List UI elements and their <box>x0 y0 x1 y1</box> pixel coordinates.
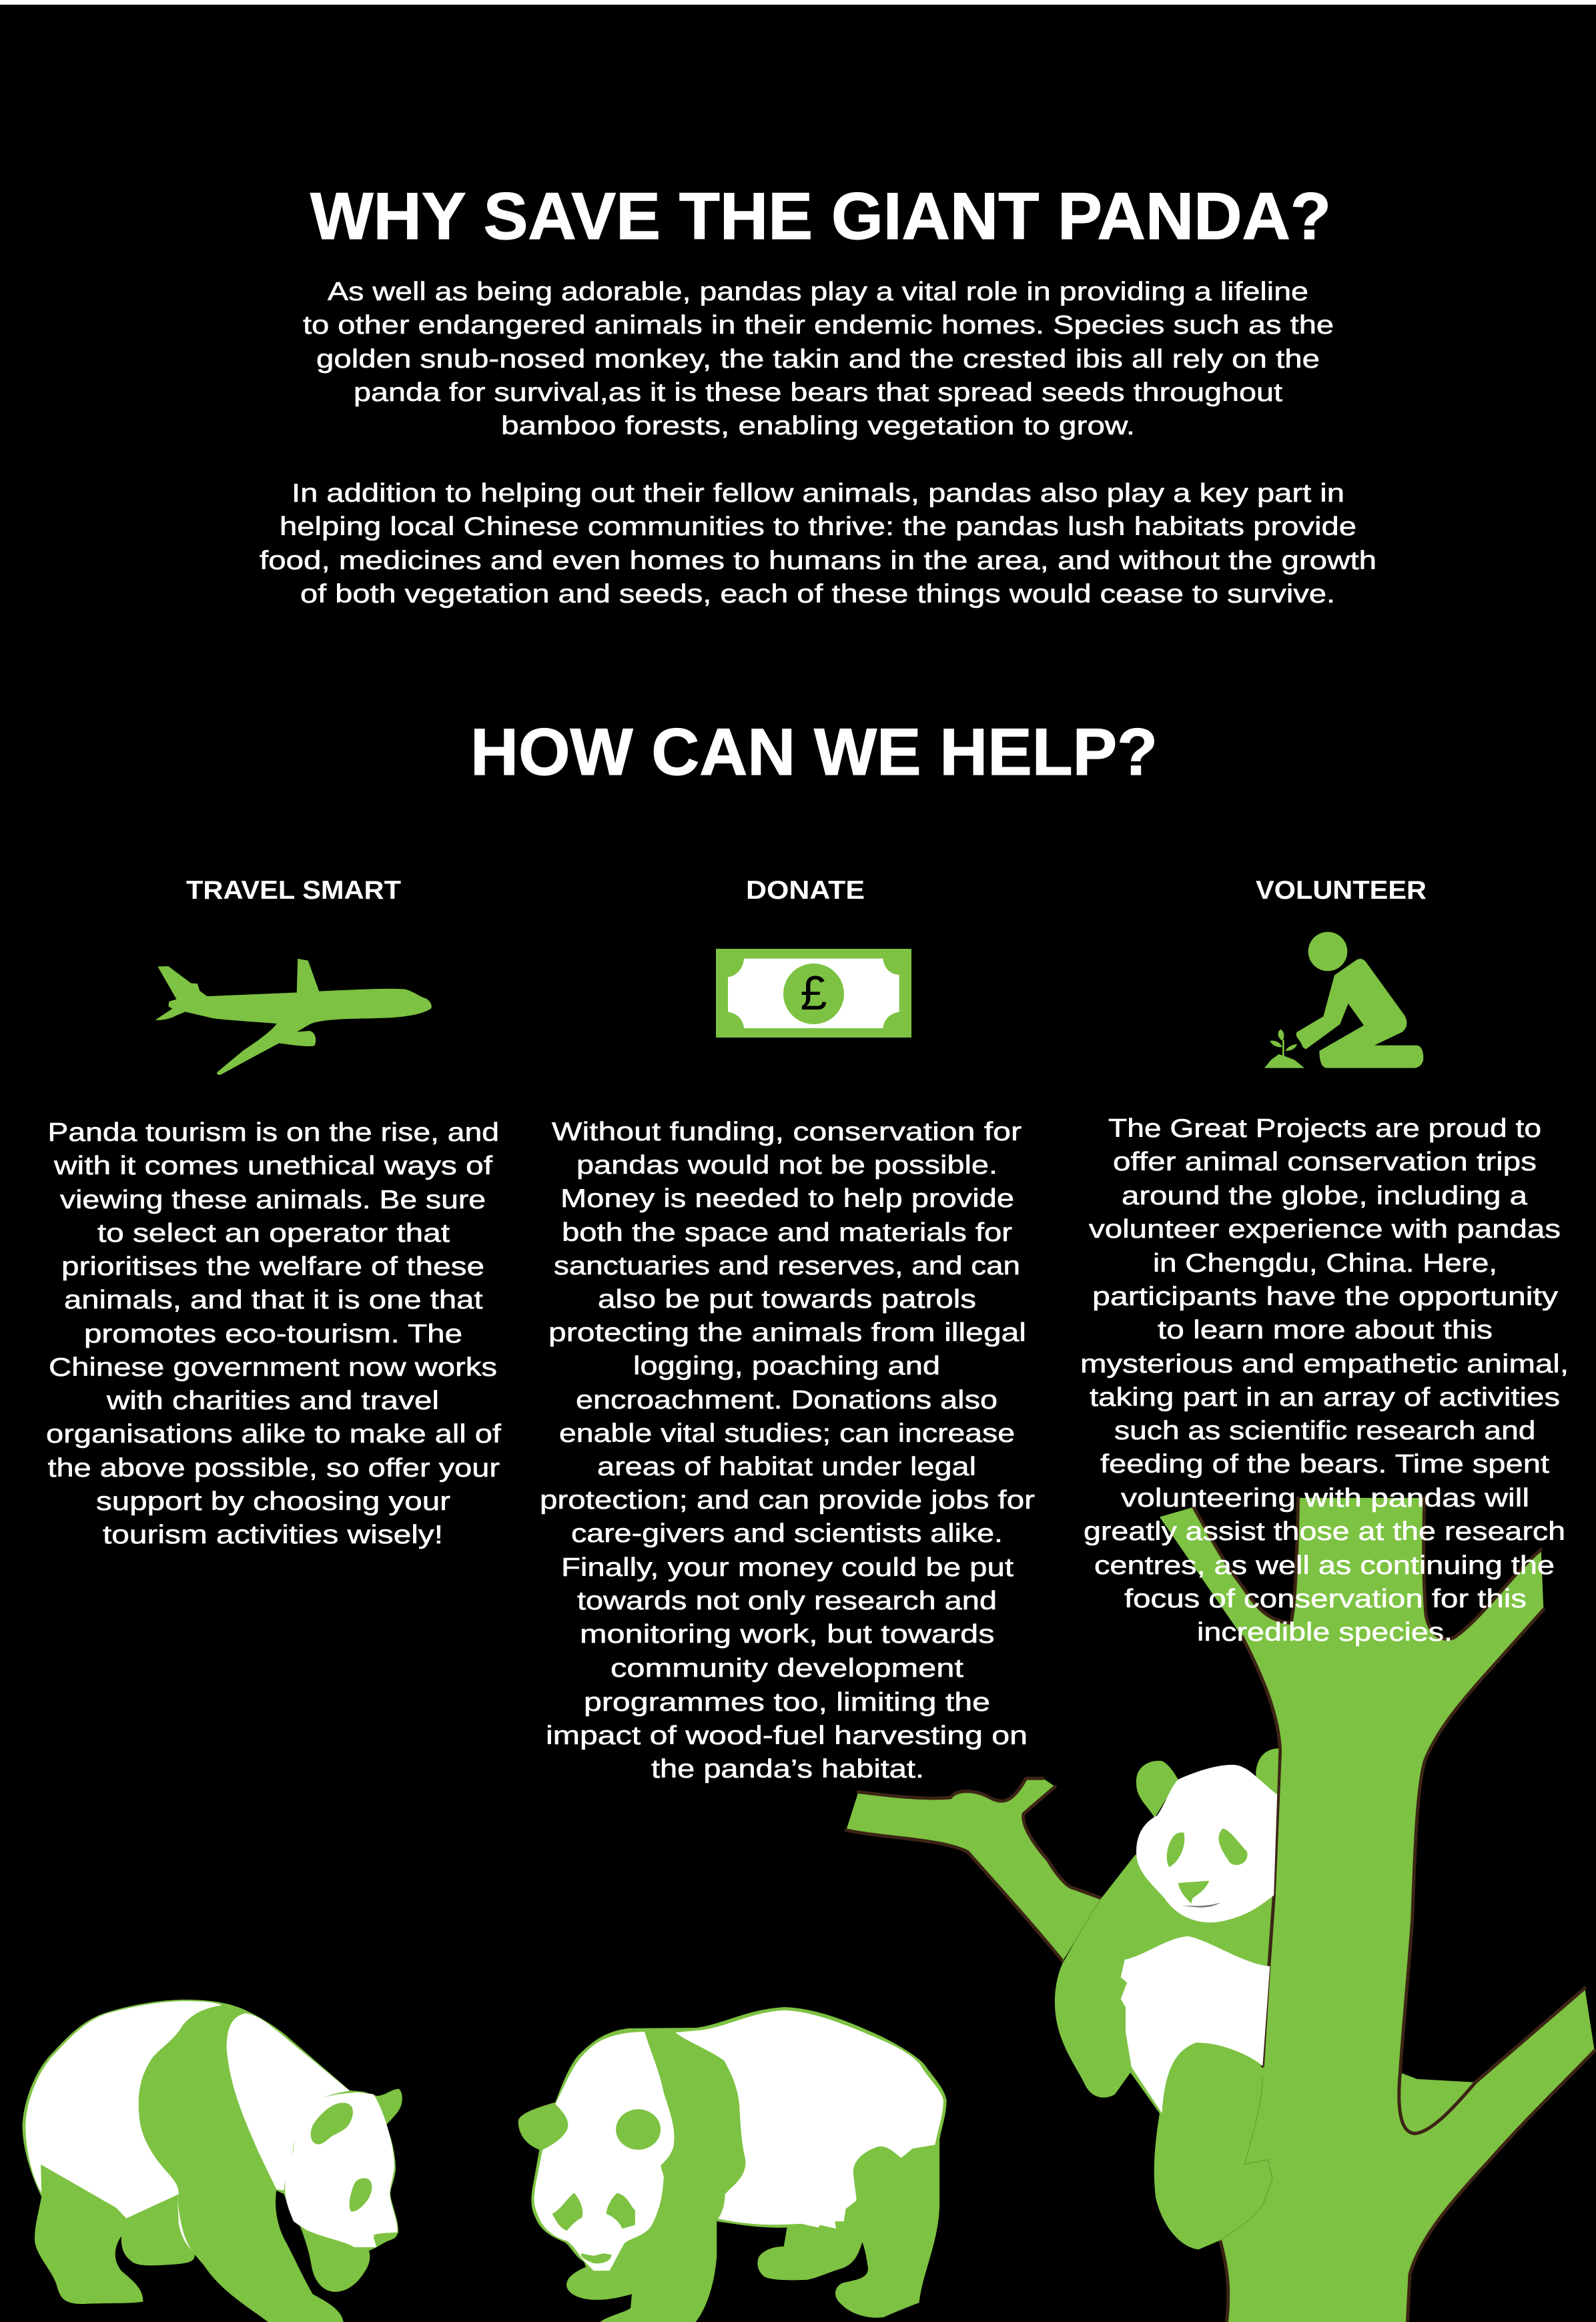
text: travel smart: animals, and that it is one that <box>64 1286 483 1314</box>
text: donate: protecting the animals from illegal <box>548 1318 1026 1347</box>
intro text paragraph one: panda for survival,as it is these bears that spread seeds throughout <box>354 378 1282 407</box>
intro text paragraph two: In addition to helping out their fellow animals, pandas also play a key part in <box>292 479 1344 508</box>
icon: pound banknote <box>716 949 911 1038</box>
tree trunk <box>1160 1498 1595 2322</box>
column heading: donate: DONATE <box>746 876 865 905</box>
text: volunteer: incredible species. <box>1197 1618 1453 1647</box>
text: volunteer: volunteer experience with pandas <box>1089 1215 1561 1244</box>
illustration: tree with climbing panda <box>846 1498 1595 2322</box>
text: volunteer: greatly assist those at the research <box>1084 1517 1565 1546</box>
text: travel smart: promotes eco-tourism. The <box>84 1320 462 1348</box>
text: volunteer: to learn more about this <box>1158 1316 1493 1344</box>
text: travel smart: organisations alike to make all of <box>46 1420 501 1449</box>
intro text paragraph two: food, medicines and even homes to humans in the area, and without the growth <box>260 546 1376 575</box>
text: donate: logging, poaching and <box>633 1352 940 1381</box>
column heading: volunteer: VOLUNTEER <box>1256 876 1427 905</box>
text: volunteer: focus of conservation for this <box>1124 1585 1527 1613</box>
text: volunteer: The Great Projects are proud to <box>1108 1114 1541 1143</box>
text: volunteer <box>1080 1114 1569 1647</box>
text: donate: monitoring work, but towards <box>580 1620 994 1649</box>
text: donate: towards not only research and <box>577 1587 997 1615</box>
text: travel smart <box>46 1118 501 1549</box>
text: donate: enable vital studies; can increase <box>559 1419 1015 1448</box>
text: donate: Money is needed to help provide <box>560 1184 1014 1213</box>
text: volunteer: in Chengdu, China. Here, <box>1153 1249 1497 1278</box>
icon: pound banknote: £ <box>800 967 827 1020</box>
text: donate: areas of habitat under legal <box>597 1453 976 1481</box>
text: donate: care-givers and scientists alike. <box>571 1519 1003 1548</box>
climbing panda <box>1055 1748 1280 2249</box>
tree side branch <box>846 1778 1102 1961</box>
text: donate: community development <box>611 1654 963 1683</box>
text: volunteer: such as scientific research and <box>1114 1417 1536 1445</box>
text: volunteer: centres, as well as continuing the <box>1094 1551 1555 1580</box>
text: donate: also be put towards patrols <box>598 1285 976 1314</box>
intro text paragraph one: bamboo forests, enabling vegetation to grow. <box>501 412 1135 440</box>
intro text paragraph two <box>260 479 1376 609</box>
text: travel smart: tourism activities wisely! <box>103 1521 443 1549</box>
text: donate: pandas would not be possible. <box>576 1151 998 1180</box>
text: travel smart: support by choosing your <box>96 1487 450 1516</box>
text: travel smart: with it comes unethical ways of <box>53 1152 492 1180</box>
text: donate: the panda’s habitat. <box>651 1755 924 1784</box>
text: travel smart: the above possible, so offer your <box>48 1454 500 1483</box>
text: donate: protection; and can provide jobs for <box>540 1486 1035 1515</box>
text: volunteer: participants have the opportunity <box>1092 1282 1559 1311</box>
illustration: panda walking left side <box>22 2000 402 2322</box>
text: travel smart: viewing these animals. Be sure <box>60 1186 486 1214</box>
intro text paragraph two: helping local Chinese communities to thrive: the pandas lush habitats provide <box>280 512 1356 541</box>
text: volunteer: taking part in an array of activities <box>1090 1383 1560 1412</box>
text: volunteer: volunteering with pandas will <box>1121 1484 1529 1513</box>
text: donate <box>540 1118 1035 1784</box>
text: travel smart: to select an operator that <box>97 1219 450 1248</box>
text: travel smart: with charities and travel <box>106 1387 439 1415</box>
text: donate: Finally, your money could be put <box>561 1553 1014 1582</box>
column heading: travel smart: TRAVEL SMART <box>186 876 401 905</box>
text: donate: sanctuaries and reserves, and can <box>554 1252 1020 1280</box>
text: travel smart: Panda tourism is on the rise, and <box>48 1118 499 1147</box>
title: why save the giant panda: WHY SAVE THE GIANT PANDA? <box>310 179 1331 253</box>
text: volunteer: mysterious and empathetic animal, <box>1080 1350 1569 1379</box>
intro text paragraph one: to other endangered animals in their endemic homes. Species such as the <box>303 311 1334 340</box>
text: travel smart: Chinese government now works <box>49 1353 497 1382</box>
icon: volunteer planting a seedling <box>1264 932 1423 1068</box>
text: donate: programmes too, limiting the <box>584 1688 990 1717</box>
intro text paragraph one: golden snub-nosed monkey, the takin and the crested ibis all rely on the <box>316 345 1320 374</box>
intro text paragraph one: As well as being adorable, pandas play a vital role in providing a lifeline <box>328 278 1308 306</box>
text: volunteer: around the globe, including a <box>1122 1182 1527 1210</box>
intro text paragraph one <box>303 278 1334 440</box>
text: donate: impact of wood-fuel harvesting on <box>546 1721 1028 1750</box>
text: travel smart: prioritises the welfare of these <box>61 1252 484 1281</box>
text: donate: encroachment. Donations also <box>576 1386 998 1415</box>
text: volunteer: offer animal conservation trips <box>1113 1148 1537 1176</box>
intro text paragraph two: of both vegetation and seeds, each of these things would cease to survive. <box>300 580 1335 609</box>
text: donate: Without funding, conservation for <box>552 1118 1022 1146</box>
icon: airplane <box>155 959 432 1075</box>
illustration: panda walking facing forward <box>518 2007 947 2322</box>
text: donate: both the space and materials for <box>562 1218 1012 1247</box>
heading: how can we help: HOW CAN WE HELP? <box>470 715 1158 789</box>
text: volunteer: feeding of the bears. Time spent <box>1100 1450 1549 1479</box>
